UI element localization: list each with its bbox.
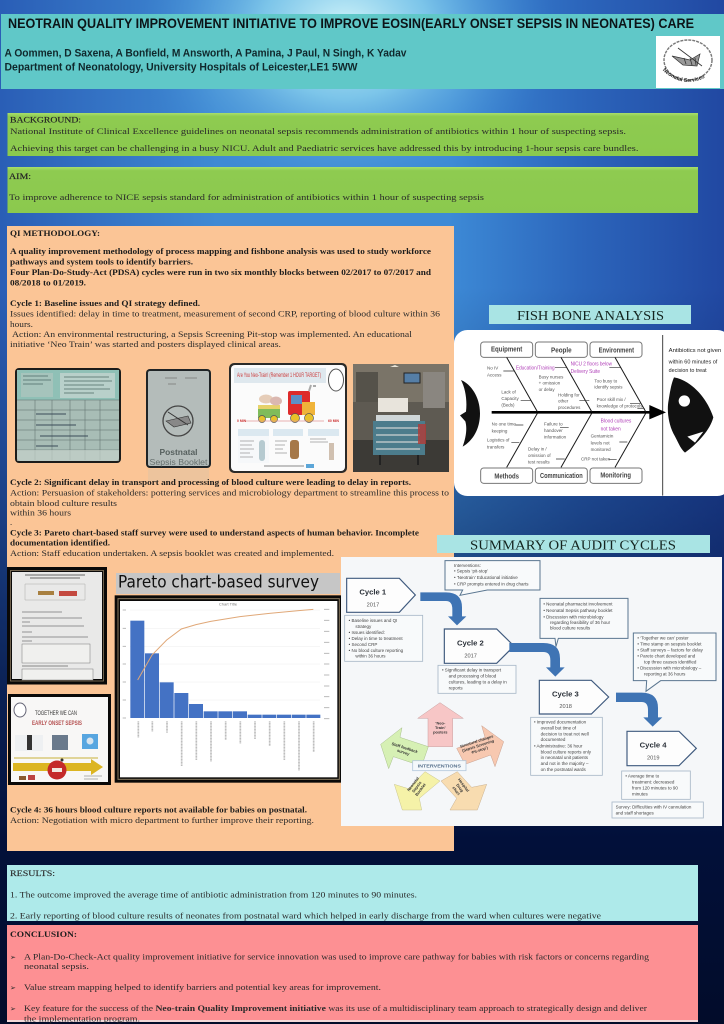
aim text: To improve adherence to NICE sepsis standard for administration of antibiotics within 1 hour of suspecting sepsis — [9, 192, 485, 202]
category labels: Communication — [540, 473, 583, 480]
poster: together we can: EARLY ONSET SEPSIS — [32, 720, 82, 727]
photo: postnatal sepsis booklet: Postnatal — [160, 447, 198, 457]
arrow: neo-train posters — [418, 703, 463, 747]
causes: Busy nurses — [539, 374, 564, 379]
heading: aim: AIM: — [9, 171, 31, 181]
text box: cycle 4 outcome: minutes — [632, 792, 648, 797]
survey form — [7, 567, 107, 684]
arrow: staff feedback survey: survey — [396, 748, 411, 757]
callout: cycle 1 interventions: • CRP prompts entered in drug charts — [454, 581, 529, 586]
panel: conclusion — [7, 925, 698, 1024]
causes: procedures — [558, 405, 581, 410]
arrow: hospital drug chart: Drug — [455, 783, 465, 794]
causes: Capacity — [501, 396, 520, 401]
cycle 3 text: Cycle 3: Pareto chart-based staff survey were used to understand aspects of human behavior. Incomplete — [10, 528, 419, 538]
cycle 1 text: hours. — [10, 319, 33, 329]
causes: transfers — [487, 444, 505, 449]
causes: Gentamicin — [591, 434, 614, 439]
arrow: neo-train posters: posters — [433, 730, 448, 735]
causes: other — [558, 399, 569, 404]
text box: cycle 1 findings: • Delay in time to treatment — [349, 636, 403, 641]
effect statement: within 60 minutes of — [668, 359, 718, 365]
heading: background: BACKGROUND: — [10, 114, 81, 124]
causes: keeping — [492, 429, 508, 434]
conclusion bullets: Value stream mapping helped to identify barriers and potential key areas for improvement. — [24, 982, 381, 992]
category labels: Equipment — [491, 347, 523, 354]
cycle 2 marker: 2017 — [464, 653, 477, 659]
highlighted causes: Delivery Suite — [571, 369, 600, 375]
callout: cycle 1 interventions: • ‘Neotrain’ Educational initiative — [454, 575, 518, 580]
text box: cycle 1 findings — [345, 615, 423, 661]
cycle 3 text: Action: Staff education undertaken. A sepsis booklet was created and implemented. — [10, 548, 334, 558]
heading: fish bone analysis — [489, 305, 691, 324]
causes: Holding for — [558, 392, 580, 397]
cycle 3 marker: Cycle 3 — [552, 689, 579, 698]
callout: cycle 1 interventions: Interventions: — [454, 563, 481, 568]
header banner — [1, 14, 724, 89]
text box: cycle 3 findings: • Administrative: 36 hour — [534, 743, 583, 748]
text box: cycle 3 findings: • Improved documentation — [534, 719, 587, 724]
panel: background — [8, 113, 698, 156]
highlighted causes — [516, 362, 632, 432]
causes: CRP not taken — [581, 456, 611, 461]
poster: are you neo-train: Are You Neo-Train! (Remember 1 HOUR TARGET) — [237, 372, 321, 379]
cycle 2 marker — [444, 629, 514, 663]
cycle 1 text: Cycle 1: Baseline issues and QI strategy defined. — [10, 298, 200, 308]
cycle 2 text: Action: Persuasion of stakeholders: pottering services and microbiology department to streamline this process to — [10, 488, 449, 498]
causes: Delay in / — [528, 446, 547, 451]
effect statement: Antibiotics not given — [669, 348, 721, 354]
methodology intro: Four Plan-Do-Study-Act (PDSA) cycles were run in two six monthly blocks between 02/2017 to 07/2017 and — [10, 267, 431, 277]
callout: cycle 2 interventions: regarding feasibility of 36 hour — [550, 620, 611, 625]
callout: cycle 2 interventions: • Discussion with microbiology — [543, 614, 604, 619]
cycle 3 marker — [539, 680, 609, 714]
effect statement — [668, 348, 721, 374]
pareto chart: Chart Title — [219, 602, 238, 607]
heading: summary of audit cycles: SUMMARY OF AUDIT CYCLES — [470, 538, 676, 552]
highlighted causes: Education/Training — [516, 365, 555, 371]
causes — [487, 366, 643, 465]
text box: cycle 1 findings: • Baseline issues and QI — [349, 618, 397, 623]
callout: cycle 2 interventions — [540, 598, 628, 647]
fish head — [668, 377, 713, 453]
background text — [10, 126, 638, 153]
text box: cycle 4 outcome — [622, 771, 690, 799]
callout: cycle 3 interventions — [633, 633, 716, 691]
logo: neonatal services: Neonatal Services — [662, 68, 704, 82]
methodology intro — [10, 246, 431, 288]
cycle 2 text: within 36 hours — [10, 508, 72, 518]
callout: cycle 1 interventions: • Sepsis ‘pit-stop’ — [454, 569, 488, 574]
callout: cycle 2 interventions: blood culture results — [550, 626, 591, 631]
category labels: Methods — [494, 473, 519, 480]
conclusion bullets: A Plan-Do-Check-Act quality improvement initiative for service innovation was used to improve care pathway for babies with risk factors or concerns regarding — [24, 952, 650, 962]
conclusion bullets: ➢ — [10, 954, 16, 962]
poster: together we can: TOGETHER WE CAN — [35, 711, 77, 717]
causes: omission of — [528, 453, 551, 458]
background text: National Institute of Clinical Excellence guidelines on neonatal sepsis recommends administration of antibiotics within 1 hour of suspecting sepsis. — [10, 126, 626, 136]
highlighted causes: Blood cultures — [601, 419, 632, 425]
causes: Too busy to — [594, 378, 618, 383]
spine and ribs — [492, 357, 666, 467]
text box: cycle 3 findings: documented — [541, 737, 566, 742]
callout: cycle 2 interventions: • Neonatal pharmacist involvement — [543, 602, 613, 607]
cycle 1 text: initiative ‘Neo Train’ was started and posters displayed clinical areas. — [10, 339, 281, 349]
arrow: neonatal sepsis booklet: Neonatal — [406, 776, 420, 792]
text box: cycle 4 outcome: from 120 minutes to 90 — [632, 786, 678, 791]
category boxes — [481, 342, 642, 483]
causes: + omission — [539, 381, 561, 386]
text box: cycle 3 findings: and not in the majority – — [541, 761, 589, 766]
cycle 3 text: documentation identified. — [10, 538, 110, 548]
effect statement: decision to treat — [669, 368, 707, 374]
arrow: neonatal sepsis booklet: Sepsis — [411, 780, 423, 793]
cycle 1 text: Action: An environmental restructuring, a Sepsis Screening Pit-stop was implemented. An educational — [12, 329, 413, 339]
causes: Lack of — [501, 390, 517, 395]
arrow: neo-train posters: Train’ — [435, 725, 446, 730]
causes: identify sepsis — [594, 385, 623, 390]
text box: cycle 1 findings: • No blood culture reporting — [349, 648, 404, 653]
heading: results: RESULTS: — [10, 868, 55, 878]
photo: sepsis pit-stop trolley — [353, 364, 449, 472]
causes: levels not — [591, 440, 610, 445]
callout: cycle 3 interventions: • Discussion with microbiology – — [637, 665, 702, 670]
text box: cycle 1 findings: • Second CRP — [349, 642, 377, 647]
logo: neonatal services — [656, 36, 720, 88]
cycle 3 text — [10, 528, 419, 558]
conclusion bullets: ➢ — [10, 984, 16, 992]
arrow: hospital drug chart — [441, 772, 487, 810]
conclusion bullets: ➢ — [10, 1005, 16, 1013]
label: interventions: INTERVENTIONS — [418, 763, 462, 769]
arrow: structural changes: (Sepsis Screening — [462, 739, 495, 753]
text box: survey difficulties: Survey: Difficulties with IV cannulation — [616, 804, 692, 809]
text box: cycle 1 findings: • Issues identified: — [349, 630, 385, 635]
cycle 2 text: . — [10, 517, 12, 527]
conclusion bullets: Key feature for the success of the Neo-train Quality Improvement initiative was its use of a multidisciplinary team approach to strategically design and deliver — [24, 1003, 647, 1013]
text box: cycle 4 outcome: • Average time to — [625, 773, 660, 778]
affiliation: Department of Neonatology, University Hospitals of Leicester,LE1 5WW — [4, 62, 358, 74]
arrow: structural changes: ‘Pit-stop’) — [471, 746, 489, 755]
callout: cycle 3 interventions: • ‘Together we can’ poster — [637, 635, 689, 640]
title: NEOTRAIN QUALITY IMPROVEMENT INITIATIVE TO IMPROVE EOSIN(EARLY ONSET SEPSIS IN NEONATES) CARE — [8, 16, 694, 31]
text box: cycle 4 outcome: treatment: decreased — [632, 780, 675, 785]
arrow: structural changes: Structural changes — [460, 734, 494, 749]
arrow: structural changes — [457, 726, 504, 767]
causes: knowledge of protocols — [597, 404, 643, 409]
causes: (Beds) — [501, 402, 515, 407]
background text: Achieving this target can be challenging in a busy NICU. Adult and Paediatric services have addressed this by introducing 1-hour sepsis care bundles. — [10, 143, 638, 153]
train illustration — [258, 385, 316, 422]
callout: cycle 3 interventions: • Pareto chart developed and — [637, 654, 696, 659]
callout: cycle 3 interventions: reporting at 36 hours — [644, 671, 686, 676]
text box: cycle 2 findings: cultures, leading to a delay in — [449, 680, 507, 685]
callout: cycle 3 interventions: • Staff surveys – factors for delay — [637, 648, 704, 653]
axis tick marks — [123, 609, 329, 719]
causes: monitored — [591, 447, 611, 452]
callout: cycle 2 interventions: • Neonatal Sepsis pathway booklet — [543, 608, 613, 613]
text box: cycle 3 findings: on the postnatal wards — [541, 767, 587, 772]
cycle 2 text — [10, 477, 449, 527]
methodology intro: 08/2018 to 01/2019. — [10, 278, 86, 288]
cycle 1 marker: Cycle 1 — [359, 588, 387, 597]
panel: summary of audit cycles — [341, 557, 722, 826]
fish tail — [460, 380, 480, 447]
causes: Failure to — [544, 422, 563, 427]
text box: cycle 3 findings: decision to treat not well — [541, 731, 589, 736]
causes: or delay — [539, 387, 555, 392]
poster: are you neo-train — [229, 363, 347, 473]
category labels: People — [551, 347, 572, 354]
category labels: Monitoring — [600, 473, 631, 480]
category labels: Environment — [599, 347, 635, 354]
arrow: cycle 3 to cycle 4 — [616, 693, 662, 727]
text box: cycle 3 findings: overall but time of — [541, 725, 577, 730]
text box: cycle 2 findings: reports — [449, 686, 463, 691]
text box: survey difficulties: and staff shortages — [616, 810, 654, 815]
text box: survey difficulties — [612, 802, 703, 818]
callout: cycle 3 interventions: top three causes identified — [644, 659, 697, 664]
heading: fish bone analysis: FISH BONE ANALYSIS — [517, 308, 664, 323]
text box: cycle 2 findings — [438, 665, 516, 693]
arrow: cycle 1 to cycle 2 — [420, 592, 466, 625]
cycle 1 marker — [347, 578, 415, 612]
pareto heading: Pareto chart-based survey — [118, 572, 319, 592]
cycle 1 marker: 2017 — [367, 603, 379, 609]
callout: cycle 3 interventions: • Time stamp on sespsis booklet — [637, 642, 702, 647]
cycle 3 marker: 2018 — [559, 704, 572, 710]
interventions wheel — [381, 703, 504, 810]
text box: cycle 1 findings: strategy — [355, 624, 372, 629]
conclusion bullets: neonatal sepsis. — [24, 961, 89, 971]
highlighted causes: not taken — [601, 426, 621, 432]
arrow: hospital drug chart: chart — [451, 785, 462, 797]
arrow: staff feedback survey — [381, 728, 428, 769]
rotated category labels — [138, 721, 314, 771]
poster: together we can — [8, 694, 111, 785]
arrow: neonatal sepsis booklet — [394, 772, 440, 810]
cycle 2 text: obtain blood culture results — [10, 498, 118, 508]
cycle 4 marker: Cycle 4 — [640, 741, 667, 750]
conclusion bullets: the implementation program. — [24, 1014, 140, 1024]
arrow: staff feedback survey: Staff feedback — [391, 741, 419, 754]
cycle 4 text: Action: Negotiation with micro department to further improve their reporting. — [10, 815, 314, 825]
arrow: neonatal sepsis booklet: Booklet — [414, 782, 427, 797]
authors: A Oommen, D Saxena, A Bonfield, M Answorth, A Pamina, J Paul, N Singh, K Yadav — [4, 48, 407, 60]
text box: cycle 2 findings: and processing of blood — [449, 674, 497, 679]
cycle 2 text: Cycle 2: Significant delay in transport and processing of blood culture were leading to delay in reports. — [10, 477, 411, 487]
conclusion bullets — [10, 952, 650, 1024]
pareto chart — [115, 595, 343, 783]
causes: Access — [487, 373, 502, 378]
panel: aim — [8, 167, 698, 213]
methodology intro: pathways and system tools to identify barriers. — [10, 256, 193, 266]
poster: are you neo-train: 0 MIN — [237, 419, 247, 423]
cycle 4 text: Cycle 4: 36 hours blood culture reports not available for babies on postnatal. — [10, 804, 307, 814]
causes: test results — [528, 460, 550, 465]
highlighted causes: NICU 2 floors below — [571, 362, 612, 368]
results text — [10, 890, 601, 920]
bars — [130, 621, 320, 718]
arrow: hospital drug chart: Hospital — [457, 777, 470, 793]
causes: Logistics of — [487, 438, 510, 443]
cycle 4 text — [10, 804, 314, 825]
results text: 1. The outcome improved the average time of antibiotic administration from 120 minutes to 90 minutes. — [10, 890, 417, 900]
text box: cycle 3 findings — [531, 717, 602, 775]
causes: No one time — [492, 422, 516, 427]
heading: conclusion: CONCLUSION: — [10, 929, 77, 939]
cumulative line — [138, 609, 313, 680]
causes: information — [544, 435, 567, 440]
cycle 2 marker: Cycle 2 — [457, 639, 484, 648]
causes: handover — [544, 428, 563, 433]
cycle 1 text: Issues identified: delay in time to treatment, measurement of second CRP, reporting of blood culture within 36 — [10, 308, 441, 318]
panel: qi methodology — [7, 226, 454, 851]
text box: cycle 3 findings: blood culture reports only — [541, 749, 592, 754]
methodology intro: A quality improvement methodology of process mapping and fishbone analysis was used to study workforce — [10, 246, 431, 256]
heading: qi methodology: QI METHODOLOGY: — [10, 228, 100, 238]
causes: Poor skill mix / — [597, 397, 626, 402]
causes: No IV — [487, 366, 498, 371]
text box: cycle 3 findings: in neonatal unit patients — [541, 755, 589, 760]
cycle 1 text — [10, 298, 441, 349]
photo: screening form — [15, 368, 121, 463]
category labels — [491, 347, 635, 480]
arrow: cycle 2 to cycle 3 — [509, 643, 565, 677]
text box: cycle 2 findings: • Significant delay in transport — [442, 668, 502, 673]
heading: summary of audit cycles — [437, 535, 710, 553]
results text: 2. Early reporting of blood culture results of neonates from postnatal ward which helped in early discharge from the ward when cultures were negative — [10, 910, 601, 920]
cycle 4 marker: 2019 — [647, 755, 660, 761]
callout: cycle 1 interventions — [445, 561, 540, 595]
text box: cycle 1 findings: within 36 hours — [355, 654, 386, 659]
photo: postnatal sepsis booklet — [146, 369, 211, 481]
panel: results — [7, 865, 698, 921]
fishbone diagram — [454, 330, 724, 496]
photo: postnatal sepsis booklet: Sepsis Booklet — [150, 457, 208, 467]
cycle 4 marker — [627, 731, 696, 766]
arrow: neo-train posters: ‘Neo- — [435, 720, 446, 725]
poster: are you neo-train: 60 MIN — [328, 419, 339, 423]
